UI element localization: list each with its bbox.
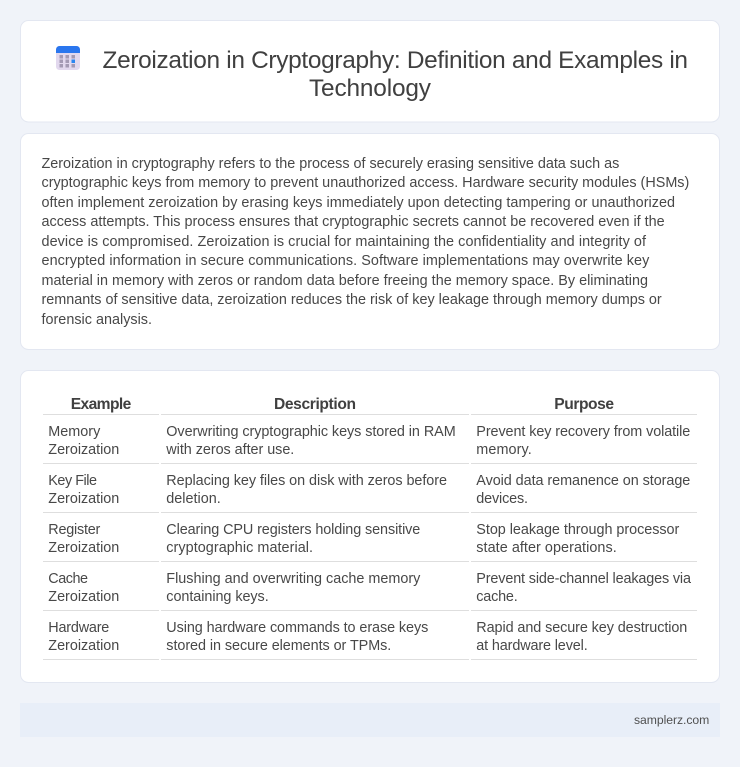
title: Technology [309,75,432,102]
text block: definition paragraph: Zeroization in cryptography refers to the process of securely erasing sensitive data such as [42,156,619,172]
panel: examples table [20,370,720,682]
table row: cache zeroization: Flushing and overwriting cache memory [166,571,421,587]
table row: hardware zeroization: Using hardware commands to erase keys [166,620,428,636]
text block: definition paragraph: encrypted information in secure communications. Software implementations may overwrite key [42,253,650,269]
table row: hardware zeroization [43,620,697,660]
table row: key file zeroization: Replacing key files on disk with zeros before [166,473,447,489]
text block: definition paragraph: remnants of sensitive data, zeroization reduces the risk of key leakage through memory dumps or [42,292,662,308]
table row: hardware zeroization: Hardware [48,620,109,636]
table row: register zeroization: Register [48,522,101,538]
table row: register zeroization: Zeroization [48,540,119,556]
text block: definition paragraph: material in memory with zeros or random data before freeing the memory space. By eliminating [42,273,648,289]
table row: register zeroization: Clearing CPU registers holding sensitive [166,522,420,538]
text block: definition paragraph: forensic analysis. [42,312,152,328]
text block: definition paragraph [42,156,689,328]
table row: key file zeroization: Key File [48,473,97,489]
panel: definition text [20,134,720,350]
table row: cache zeroization: Prevent side-channel leakages via [476,571,691,587]
table row: key file zeroization: Zeroization [48,491,119,507]
title [102,47,688,102]
text block: definition paragraph: access attempts. This process ensures that cryptographic secrets cannot be recovered even if the [42,214,665,230]
table row: hardware zeroization: stored in secure elements or TPMs. [166,638,391,654]
table row: memory zeroization: memory. [476,442,532,458]
table row: key file zeroization [43,473,697,512]
table row: memory zeroization: Overwriting cryptographic keys stored in RAM [166,424,456,440]
table row: memory zeroization: Prevent key recovery from volatile [476,424,690,440]
table row: key file zeroization: deletion. [166,491,221,507]
text block: definition paragraph: cryptographic keys from memory to prevent unauthorized access. Hardware security modules (HSMs) [42,175,689,191]
table row: hardware zeroization: at hardware level. [476,638,588,654]
table header row: Example [71,396,132,413]
table row: cache zeroization: cache. [476,589,518,605]
panel: title card [20,20,720,122]
table row: cache zeroization [43,571,697,610]
table row: memory zeroization: Zeroization [48,442,119,458]
footer: source bar [20,703,720,737]
table row: cache zeroization: containing keys. [166,589,269,605]
table row: key file zeroization: devices. [476,491,528,507]
table row: hardware zeroization: Zeroization [48,638,119,654]
table row: memory zeroization: Memory [48,424,101,440]
table row: register zeroization [43,522,697,562]
text block: definition paragraph: device is compromised. Zeroization is crucial for maintaining the confidentiality and integrity of [42,234,647,250]
table row: register zeroization: cryptographic material. [166,540,313,556]
table header row [43,396,697,414]
table header row: Purpose [554,396,614,413]
text block: definition paragraph: often implement zeroization by erasing keys immediately upon detecting tampering or unauthorized [42,195,675,211]
footer: source bar: samplerz.com [634,713,709,727]
table row: cache zeroization: Cache [48,571,88,587]
table row: register zeroization: Stop leakage through processor [476,522,680,538]
title: Zeroization in Cryptography: Definition and Examples in [102,47,688,74]
table row: key file zeroization: Avoid data remanence on storage [476,473,690,489]
icon: calendar grid [56,46,80,70]
table header row: Description [274,396,356,413]
table row: hardware zeroization: Rapid and secure key destruction [476,620,687,636]
table row: cache zeroization: Zeroization [48,589,119,605]
table row: register zeroization: state after operations. [476,540,617,556]
table row: memory zeroization [43,424,697,464]
table row: memory zeroization: with zeros after use. [165,442,294,458]
